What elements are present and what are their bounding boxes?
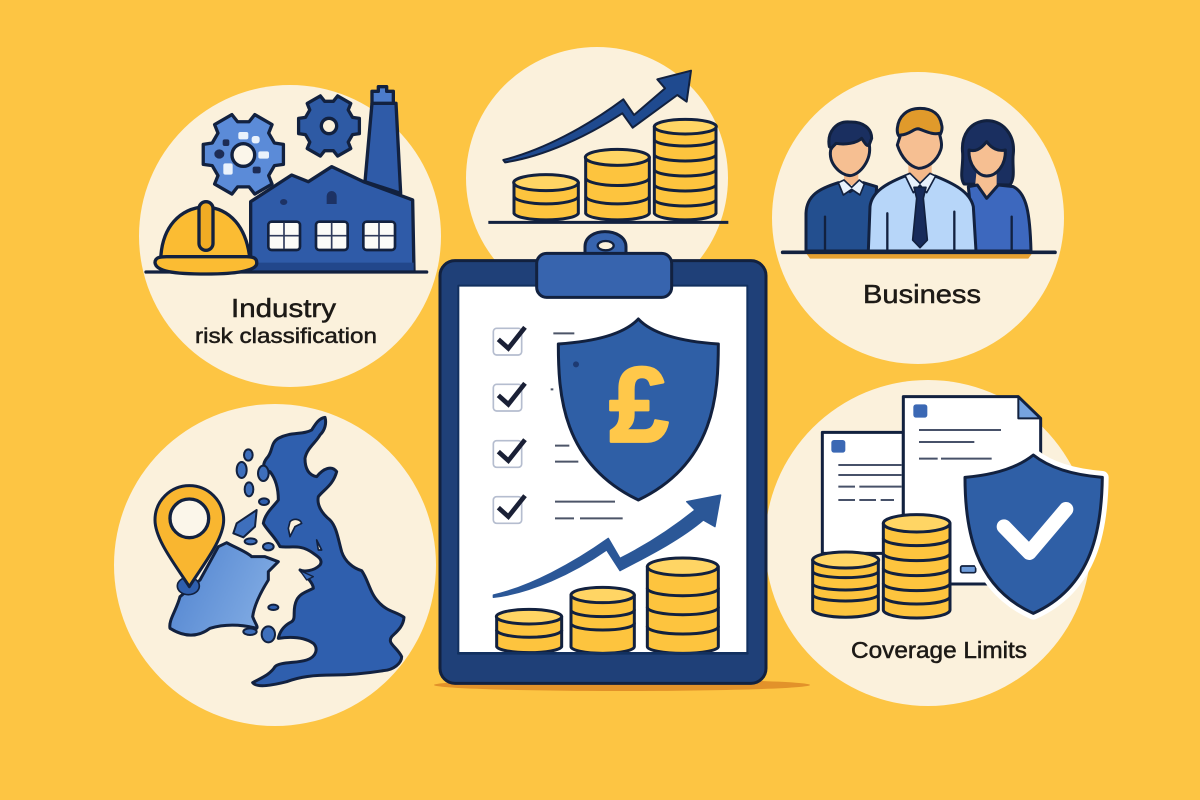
heading: Business: Business [863, 279, 981, 309]
panel: premium growth circle [466, 47, 728, 309]
icon: rising coin stacks and arrow [488, 71, 728, 222]
icon: map of the UK with location pin [155, 417, 404, 686]
panel: industry risk classification [139, 85, 441, 387]
icon: shield with pound sign [558, 319, 718, 500]
panel: UK location map [114, 404, 436, 726]
heading: Coverage Limits: Coverage Limits [851, 637, 1027, 663]
icon: coin stacks [496, 558, 718, 653]
checklist [493, 327, 623, 523]
icon: factory, gears and hard hat [146, 87, 427, 274]
panel: coverage limits [765, 380, 1102, 706]
panel: business [772, 72, 1064, 364]
icon: clipboard clip [537, 232, 672, 297]
heading: Industry: Industry [231, 293, 336, 323]
icon: shield with pound sign: £ [609, 344, 669, 464]
panel: central clipboard [440, 232, 766, 683]
icon: three business people [783, 108, 1055, 259]
text: risk classification: risk classification [195, 325, 377, 348]
icon: clipboard shadow [434, 679, 810, 691]
icon: rising arrow [493, 495, 721, 597]
icon: documents, coins and shield [813, 397, 1102, 618]
